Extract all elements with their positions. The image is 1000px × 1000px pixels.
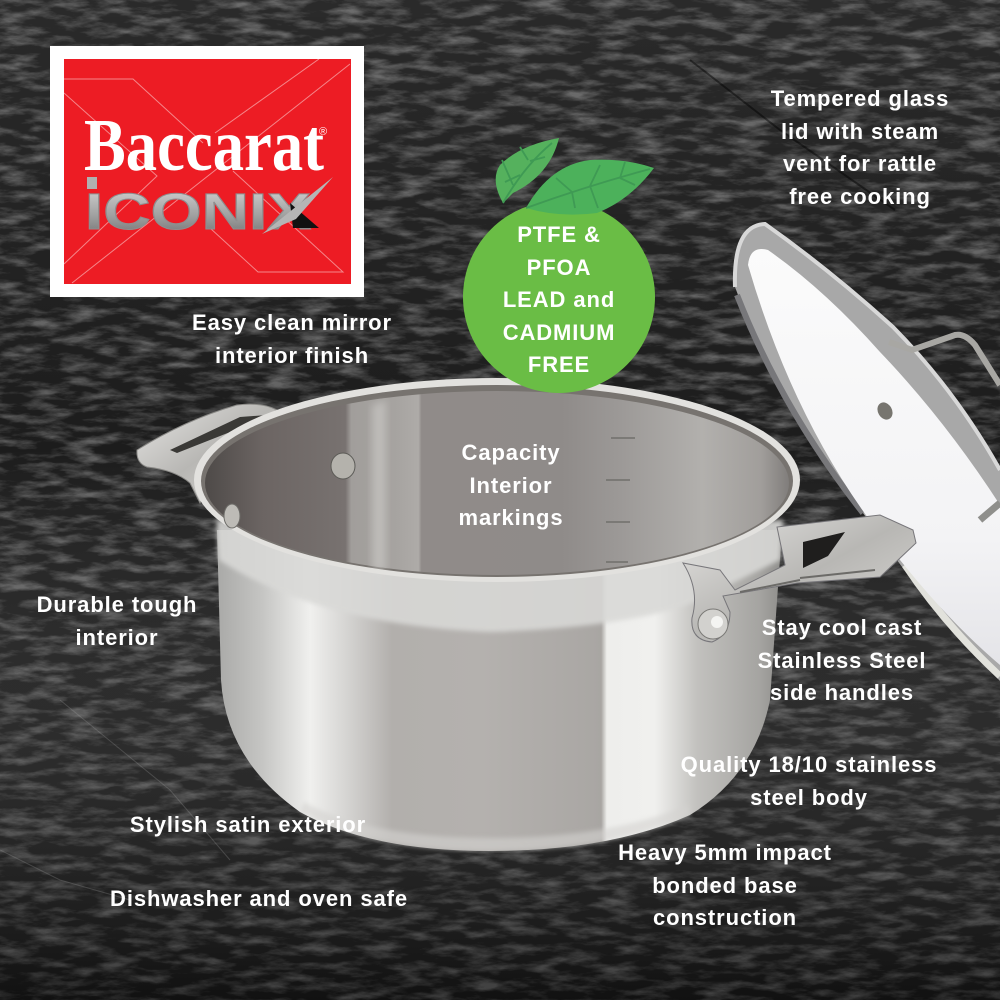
label: capacity: Interior xyxy=(470,472,552,498)
badge text: FREE xyxy=(528,352,590,377)
label: handles: Stainless Steel xyxy=(758,648,926,672)
label: capacity xyxy=(458,440,564,530)
leaf left xyxy=(496,138,559,203)
label: capacity: Capacity xyxy=(462,440,560,465)
badge text xyxy=(503,222,615,377)
label: lid: vent for rattle xyxy=(783,151,937,176)
label: lid: Tempered glass xyxy=(771,86,949,111)
lid steam vent xyxy=(874,400,896,422)
label: durable: interior xyxy=(76,624,158,650)
label: handles: side handles xyxy=(770,680,914,705)
interior rivets xyxy=(331,453,355,479)
label: lid xyxy=(771,86,949,208)
label: dishwasher: Dishwasher and oven safe xyxy=(110,886,408,911)
leaf right xyxy=(526,160,654,215)
right handle xyxy=(683,515,916,642)
label: mirror finish xyxy=(192,310,392,368)
label: handles xyxy=(758,615,926,705)
left handle xyxy=(137,404,277,503)
label: lid: lid with steam xyxy=(781,118,939,144)
badge text: PTFE & xyxy=(517,222,601,247)
label: mirror finish: Easy clean mirror xyxy=(192,310,392,335)
badge text: PFOA xyxy=(527,254,591,280)
label: base xyxy=(618,840,832,930)
label: durable: Durable tough xyxy=(37,592,197,617)
label: body xyxy=(681,752,937,810)
green badge circle xyxy=(463,201,655,393)
badge text: CADMIUM xyxy=(503,320,615,344)
lid knob handle xyxy=(889,335,1000,385)
logo: Baccarat Iconix xyxy=(50,46,364,297)
label: body: steel body xyxy=(750,784,868,810)
label: satin exterior: Stylish satin exterior xyxy=(130,812,366,837)
label: durable xyxy=(37,592,197,650)
label: capacity: markings xyxy=(458,505,564,530)
logo: Baccarat Iconix: ® xyxy=(319,126,327,138)
label: handles: Stay cool cast xyxy=(762,615,922,640)
pot body xyxy=(194,378,800,851)
label: lid: free cooking xyxy=(789,184,931,208)
lid xyxy=(735,224,1000,681)
label: body: Quality 18/10 stainless xyxy=(681,752,937,777)
logo: Baccarat Iconix: ICONIX xyxy=(85,183,311,240)
capacity markings xyxy=(606,438,635,562)
label: base: bonded base xyxy=(652,872,798,898)
label: base: construction xyxy=(653,905,797,930)
badge text: LEAD and xyxy=(503,287,615,312)
label: base: Heavy 5mm impact xyxy=(618,840,832,865)
rim and interior xyxy=(194,378,800,582)
label: mirror finish: interior finish xyxy=(215,342,369,368)
